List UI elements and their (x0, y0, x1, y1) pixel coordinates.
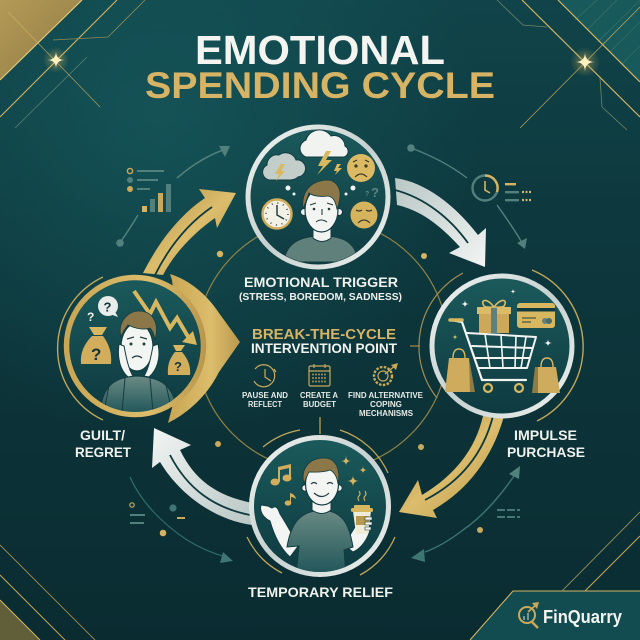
icon: sad face two (350, 202, 378, 228)
icon: list and curve, bottom left (130, 441, 233, 563)
item: create a budget: BUDGET (303, 400, 336, 409)
icon: question bubbles: ? (104, 300, 112, 314)
icon: money bag right (168, 345, 190, 375)
icon: money bag left: ? (91, 345, 101, 364)
logo: FinQuarry (519, 602, 622, 628)
icon: shopping cart (450, 320, 536, 392)
icon: falling zigzag arrow (134, 291, 197, 345)
label: impulse purchase: PURCHASE (507, 444, 585, 460)
icon: big storm cloud (300, 130, 348, 175)
label: emotional trigger: (STRESS, BOREDOM, SADNESS) (239, 292, 402, 303)
item: pause and reflect: PAUSE AND (242, 391, 288, 400)
label: temporary relief: TEMPORARY RELIEF (248, 584, 393, 600)
icon: sad face one (347, 154, 375, 182)
label: impulse purchase (507, 427, 585, 460)
person: distressed (100, 311, 177, 414)
heading: break the cycle (251, 327, 398, 356)
question marks: ? (365, 191, 369, 198)
person: smiling (261, 458, 370, 575)
panel: impulse purchase (410, 270, 585, 460)
corner decoration: top right (497, 0, 640, 130)
icon: list and curve, bottom right (411, 444, 520, 562)
question marks: ? (371, 185, 379, 200)
heading: break the cycle: BREAK-THE-CYCLE (252, 327, 396, 343)
person: worried (284, 180, 358, 262)
icon: money bag left (81, 327, 111, 364)
label: guilt regret: REGRET (75, 444, 131, 460)
item: pause and reflect (242, 365, 288, 409)
arrow: gold, impulse to relief (399, 416, 504, 518)
label: guilt regret (75, 427, 131, 460)
icon: question bubbles: ? (87, 310, 94, 324)
corner decoration: bottom right (470, 512, 640, 640)
panel: guilt and regret (58, 274, 240, 460)
sparkles (341, 456, 367, 487)
heading: break the cycle: INTERVENTION POINT (251, 341, 398, 356)
corner decoration: top left (0, 0, 145, 128)
icon: money bag right: ? (174, 359, 182, 374)
panel: break the cycle intervention (242, 327, 423, 418)
decorative inner ring (196, 219, 448, 471)
icon: list and bar chart, top left (127, 168, 171, 212)
corner decoration: bottom left (0, 545, 95, 640)
ring pointer: gold arrow tip (168, 274, 240, 423)
icon: music notes (270, 464, 296, 506)
icon: question bubbles (87, 296, 118, 324)
label: emotional trigger: EMOTIONAL TRIGGER (244, 275, 398, 290)
label: impulse purchase: IMPULSE (514, 427, 577, 443)
question marks (365, 185, 379, 200)
item: find alternative coping: COPING (370, 400, 402, 409)
arrow: thin curve, top left (116, 146, 230, 257)
label: emotional trigger (239, 275, 402, 303)
icon: clock and list, top right (407, 144, 531, 259)
icon: shopping bag right (532, 358, 560, 393)
item: find alternative coping: MECHANISMS (359, 409, 413, 418)
sparkles (452, 289, 552, 347)
item: create a budget: CREATE A (300, 391, 338, 400)
title: EMOTIONAL (195, 27, 445, 73)
arrow: white, trigger to impulse (395, 178, 486, 267)
icon: gift box (477, 300, 511, 333)
item: find alternative coping (348, 363, 423, 418)
item: pause and reflect: REFLECT (248, 400, 282, 409)
icon: clock (262, 200, 292, 228)
item: create a budget (300, 364, 338, 409)
icon: small storm cloud (263, 153, 356, 196)
title (145, 27, 495, 106)
arrow: white, relief to guilt (152, 428, 252, 525)
arrow: gold, guilt to trigger (143, 189, 236, 275)
icon: coffee cup (351, 491, 373, 534)
icon: credit card (517, 303, 555, 328)
icon: shopping bag left (445, 349, 475, 392)
panel: temporary relief (247, 417, 395, 600)
panel: emotional trigger (239, 127, 402, 303)
logo: FinQuarry: FinQuarry (543, 607, 622, 627)
label: guilt regret: GUILT/ (80, 427, 125, 443)
item: find alternative coping: FIND ALTERNATIVE (348, 391, 423, 400)
title: SPENDING CYCLE (145, 65, 495, 106)
